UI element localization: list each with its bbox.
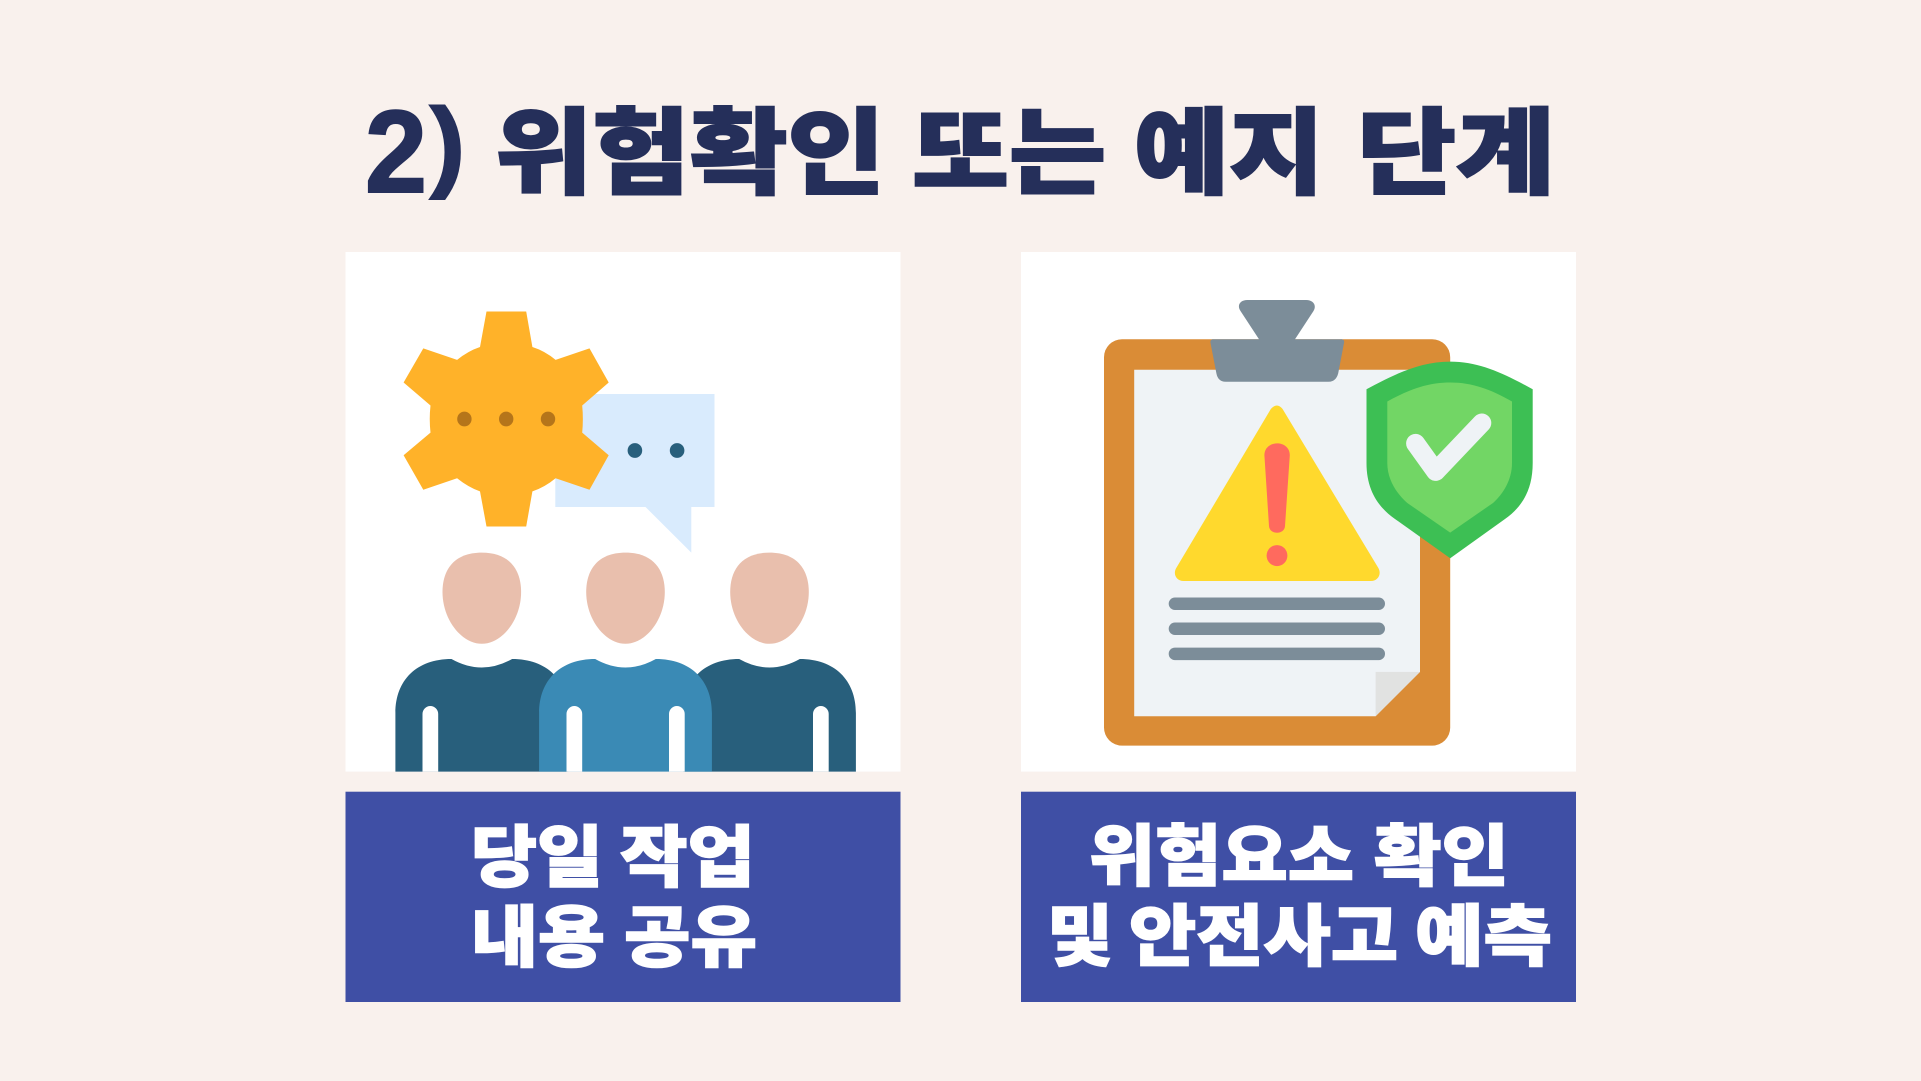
caption text line 1: 확인 — [1374, 820, 1509, 895]
text lines on document — [1169, 598, 1385, 660]
caption text line 1: 당일 — [471, 821, 603, 896]
title: 예지 — [1134, 101, 1324, 206]
icon: person centre — [539, 553, 712, 772]
title — [365, 86, 1555, 217]
panel: people illustration — [346, 252, 900, 772]
caption text line 1: 작업 — [620, 821, 755, 896]
icon: shield with check — [1366, 362, 1533, 558]
icon: gear — [404, 312, 609, 526]
caption text line 2: 공유 — [624, 901, 757, 976]
caption text line 2: 내용 — [471, 901, 605, 976]
icon: person left — [395, 553, 568, 772]
panel: right caption — [1021, 792, 1576, 1002]
caption text line 2 — [471, 901, 757, 976]
title: 2 — [365, 86, 427, 217]
caption text line 1: 위험요소 — [1089, 820, 1354, 895]
caption text line 2 — [1047, 900, 1552, 975]
icon: clipboard — [1104, 300, 1450, 746]
caption text line 1 — [471, 821, 755, 896]
panel: left caption — [346, 792, 900, 1002]
title: 단계 — [1357, 101, 1555, 206]
title: 위험확인 — [495, 101, 885, 206]
panel: clipboard illustration — [1021, 252, 1576, 772]
title: ) — [430, 88, 465, 200]
icon: person right — [683, 553, 856, 772]
caption text line 2: 및 — [1047, 900, 1113, 975]
icon: warning triangle — [1175, 405, 1380, 581]
caption text line 1 — [1089, 820, 1509, 895]
caption text line 2: 안전사고 — [1129, 900, 1398, 975]
caption text line 2: 예측 — [1415, 900, 1552, 975]
icon: speech bubble — [555, 394, 714, 553]
title: 또는 — [912, 101, 1106, 206]
